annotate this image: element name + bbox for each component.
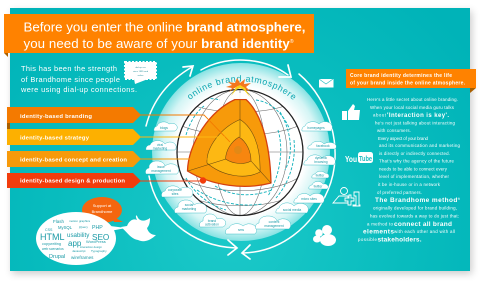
core identity callout bbox=[346, 69, 476, 93]
right column body text: he's not just talking about interacting bbox=[375, 120, 456, 126]
right column body text: elements bbox=[363, 228, 394, 236]
speech bubble: support at Brandhome: Brandhome bbox=[92, 209, 113, 214]
tab: identity-based strategy bbox=[7, 129, 141, 145]
cloud tags: marketing bbox=[182, 207, 196, 211]
title banner: you need to be aware of your brand identity bbox=[24, 36, 290, 51]
tab: identity-based design and production: identity-based design & production bbox=[20, 178, 125, 184]
icon: twitter bird bbox=[121, 215, 156, 241]
cloud tags: content bbox=[269, 220, 279, 224]
word cloud bubble bbox=[36, 212, 126, 265]
tab: identity-based concept and creation bbox=[7, 151, 141, 167]
right column body text: needs to be able to connect every bbox=[379, 166, 448, 172]
inner core bbox=[226, 137, 251, 163]
word cloud bubble: jQuery bbox=[78, 225, 88, 229]
cloud tags: management bbox=[151, 169, 171, 173]
middle layer bbox=[207, 120, 260, 176]
speech bubble: support at Brandhome: Support at bbox=[93, 203, 112, 208]
cloud tags: marketing bbox=[153, 146, 167, 150]
word cloud bubble: usability bbox=[67, 232, 90, 239]
cloud tags: social media bbox=[283, 208, 301, 212]
intro text: were using dial-up connections. bbox=[20, 85, 137, 94]
word cloud bubble: wireframes bbox=[71, 255, 94, 260]
right column body text: has evolved towards a way to do just that: bbox=[370, 214, 459, 218]
icon: thumbs up bbox=[342, 104, 360, 120]
right column body text: about bbox=[373, 112, 387, 118]
stamp note: dial-up era bbox=[135, 66, 146, 69]
word cloud bubble: Flash bbox=[53, 219, 65, 224]
cloud tags: corporate bbox=[168, 188, 182, 192]
icon: YouTube bbox=[345, 152, 373, 164]
atmosphere label bbox=[190, 82, 293, 100]
cloud tags: social bbox=[185, 203, 193, 207]
cloud tags: sms bbox=[238, 228, 244, 232]
icon: YouTube: Tube bbox=[359, 156, 372, 163]
atmosphere halo bbox=[152, 63, 330, 241]
right column body text: of preferred partners. bbox=[377, 190, 422, 195]
right column body text: with consumers. bbox=[377, 128, 411, 133]
core sections bbox=[188, 100, 271, 183]
intro text: of Brandhome since people bbox=[21, 75, 120, 84]
intro text: This has been the strength bbox=[21, 64, 117, 73]
connector lines bbox=[138, 115, 230, 181]
right column body text: 'Interaction is key'. bbox=[387, 113, 449, 119]
right column body text: originally developed for brand building, bbox=[373, 206, 457, 210]
tab: identity-based branding bbox=[7, 107, 141, 141]
intro text bbox=[20, 64, 137, 94]
word cloud bubble: CSS bbox=[45, 228, 53, 232]
right column body text: level of implementation, whether bbox=[379, 174, 450, 179]
right column body text: it be in-house or in a network bbox=[378, 182, 441, 187]
word cloud bubble: PHP bbox=[92, 225, 103, 231]
word cloud bubble: interaction design bbox=[80, 245, 102, 249]
cloud tags: management bbox=[264, 224, 284, 228]
cloud tags: viral bbox=[157, 143, 163, 147]
core identity callout: Core brand identity determines the life bbox=[350, 73, 452, 79]
icon: envelope bbox=[319, 79, 334, 88]
word cloud bubble: SEO bbox=[92, 233, 109, 242]
right column body text: is directly or indirectly connected. bbox=[379, 151, 450, 156]
core cutaway bbox=[188, 100, 271, 186]
icon: plus one bbox=[333, 188, 360, 206]
word cloud bubble: Drupal bbox=[49, 254, 65, 260]
cloud tags: homepages bbox=[307, 126, 325, 130]
cloud tags: dynamic bbox=[315, 156, 327, 160]
right column body text: possible bbox=[358, 237, 378, 242]
cloud tags: brand bbox=[208, 219, 216, 223]
word cloud bubble: MySQL bbox=[58, 225, 73, 230]
title banner: Before you enter the online brand atmosphere, bbox=[24, 20, 306, 34]
cloud tags: twitter bbox=[316, 174, 325, 178]
word cloud bubble: Typography bbox=[91, 249, 107, 253]
right column body text: The Brandhome method bbox=[375, 197, 457, 204]
title banner: ® bbox=[290, 38, 294, 45]
icon: YouTube: You bbox=[345, 154, 357, 164]
right column body text: When your local social media guru talks bbox=[370, 105, 455, 110]
dashed network lines bbox=[182, 99, 294, 210]
cloud tags: blogs bbox=[160, 126, 168, 130]
word cloud bubble: web scenarios bbox=[42, 247, 64, 251]
core identity callout: of your brand inside the online atmosphere. bbox=[350, 80, 466, 86]
right column body text bbox=[358, 97, 461, 244]
globe bbox=[177, 89, 303, 216]
stamp note: since 1995 web bbox=[133, 71, 149, 73]
word cloud bubble: Javascript bbox=[72, 249, 86, 253]
layer dot bbox=[200, 177, 206, 184]
circular arrow ring bbox=[146, 60, 335, 259]
cloud tags: browsing bbox=[314, 160, 328, 164]
right column body text: Here's a little secret about online branding. bbox=[367, 97, 458, 102]
tab: identity-based design and production bbox=[7, 173, 141, 188]
stamp note: online bbox=[138, 75, 144, 77]
volcano eruption bbox=[226, 78, 251, 99]
cloud tags: activation bbox=[205, 222, 219, 226]
tab: identity-based concept and creation: identity-based concept and creation bbox=[20, 158, 127, 164]
tab: identity-based strategy: identity-based strategy bbox=[20, 136, 90, 142]
right column body text: connect all brand bbox=[394, 221, 452, 228]
cloud tags: twitter bbox=[314, 184, 323, 188]
cloud tags: micro sites bbox=[301, 197, 317, 201]
cloud tags: sites bbox=[172, 192, 179, 196]
cloud tags: issue bbox=[157, 165, 165, 169]
right column body text: Every aspect of your brand bbox=[378, 136, 429, 141]
right column body text: stakeholders. bbox=[378, 236, 422, 244]
cloud tags: facebook bbox=[316, 144, 330, 148]
word cloud bubble: WordPress bbox=[86, 239, 106, 244]
cloud tags bbox=[145, 122, 336, 234]
right column body text: and its communication and marketing bbox=[379, 143, 461, 148]
right column body text: That's why the agency of the future bbox=[379, 158, 455, 164]
word cloud bubble: HTML bbox=[40, 232, 64, 242]
tab: identity-based branding: identity-based branding bbox=[20, 114, 92, 120]
outer layer bbox=[188, 100, 271, 186]
infographic: online brand atmosphere bbox=[188, 75, 296, 100]
word cloud bubble: app bbox=[68, 239, 82, 248]
right column body text: with each other and with all bbox=[394, 229, 455, 234]
icon: people bbox=[313, 225, 336, 246]
right column body text: ® bbox=[458, 197, 461, 201]
word cloud bubble: copywriting bbox=[42, 242, 61, 246]
title banner bbox=[4, 14, 314, 57]
speech bubble: support at Brandhome bbox=[82, 197, 123, 223]
stamp note bbox=[125, 62, 156, 84]
right column body text: a method to bbox=[367, 222, 394, 226]
word cloud bubble: motion graphics bbox=[69, 219, 91, 223]
